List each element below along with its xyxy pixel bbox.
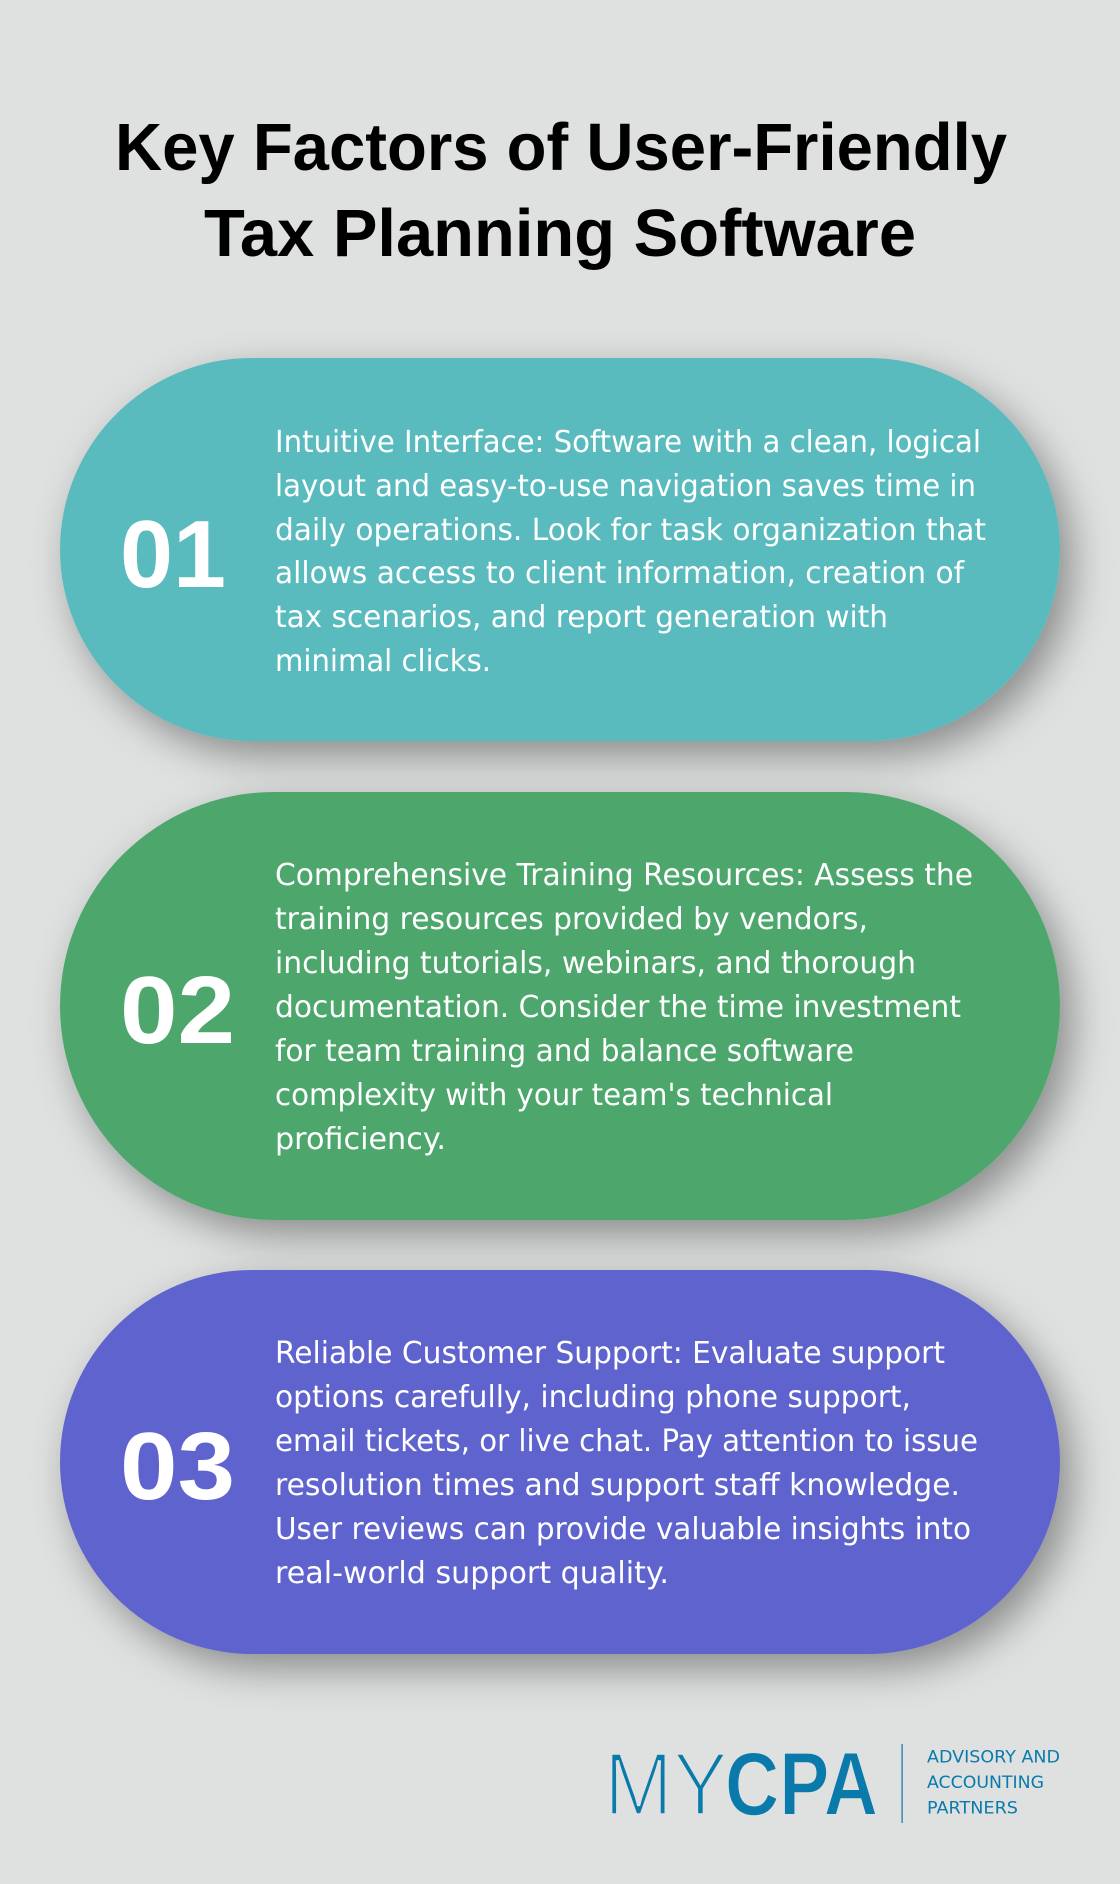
text block 02: documentation. Consider the time investment [275,990,961,1025]
title: Key Factors of User-Friendly [115,110,1007,185]
text block 01 [275,425,986,679]
text block 03: User reviews can provide valuable insights into [275,1512,971,1547]
logo: MYCPA [604,1735,1060,1835]
text block 01: daily operations. Look for task organization that [275,513,986,548]
text block 03: real-world support quality. [275,1556,669,1591]
tagline: ADVISORY AND [927,1748,1060,1768]
title: Tax Planning Software [204,196,916,271]
pill background green [60,792,1060,1220]
tagline: ACCOUNTING [927,1773,1044,1793]
number 02: 02 [120,957,235,1064]
text block 03 [275,1336,978,1591]
tagline: PARTNERS [927,1798,1018,1818]
panel: 03 customer support [60,1270,1060,1654]
tagline [927,1748,1060,1818]
text block 03: options carefully, including phone support, [275,1380,911,1415]
wordmark [604,1735,878,1835]
wordmark: CPA [725,1735,878,1835]
pill background teal [60,358,1060,741]
pill background purple [60,1270,1060,1654]
text block 03: resolution times and support staff knowledge. [275,1468,960,1503]
number 03: 03 [120,1413,235,1520]
text block 02 [275,858,973,1157]
text block 02: complexity with your team's technical [275,1078,833,1113]
text block 03: email tickets, or live chat. Pay attention to issue [275,1424,978,1459]
text block 02: training resources provided by vendors, [275,902,868,937]
text block 02: Comprehensive Training Resources: Assess the [275,858,973,893]
text block 02: including tutorials, webinars, and thorough [275,946,916,981]
text block 01: allows access to client information, creation of [275,556,965,591]
text block 02: for team training and balance software [275,1034,854,1069]
number 01: 01 [120,501,226,608]
panel: 02 training resources [60,792,1060,1220]
title [115,110,1007,271]
text block 02: proficiency. [275,1122,446,1157]
wordmark: MY [604,1735,728,1835]
text block 01: tax scenarios, and report generation with [275,600,888,635]
text block 01: minimal clicks. [275,644,491,679]
panel: 01 intuitive interface [60,358,1060,741]
text block 03: Reliable Customer Support: Evaluate support [275,1336,945,1371]
text block 01: layout and easy-to-use navigation saves time in [275,469,976,504]
text block 01: Intuitive Interface: Software with a clean, logical [275,425,981,460]
